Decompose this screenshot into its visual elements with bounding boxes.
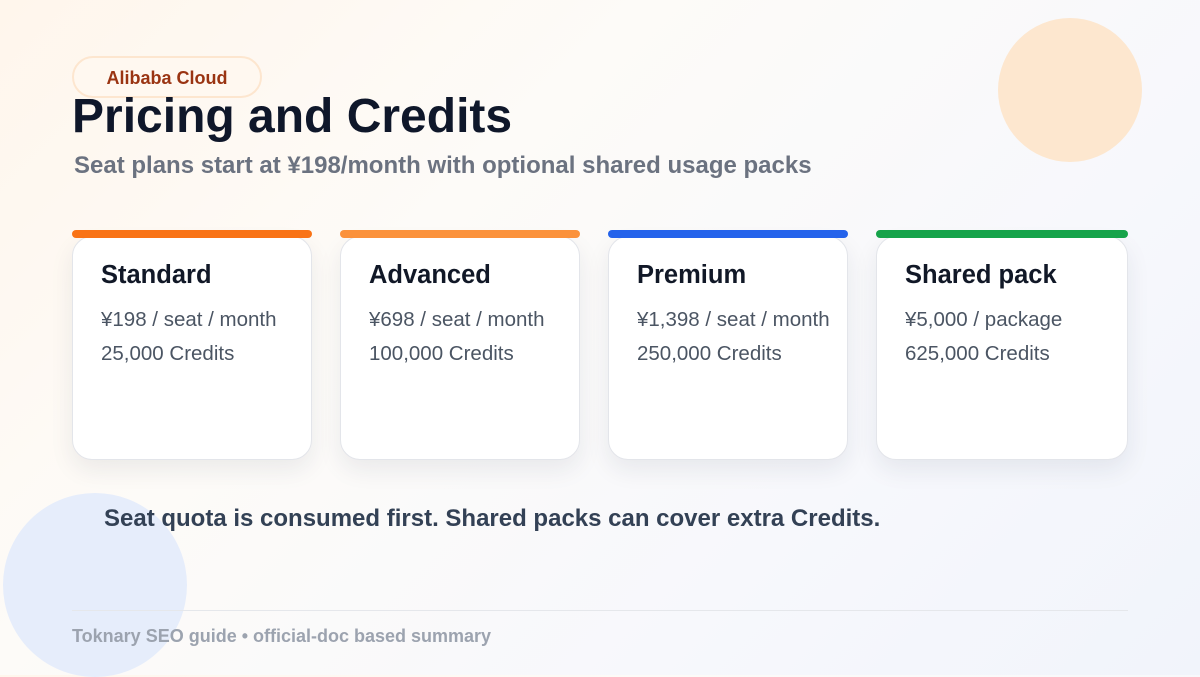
title: Pricing and Credits: [72, 90, 512, 143]
panel: Shared pack: ¥5,000 / package: [905, 308, 1062, 331]
panel: Premium: 250,000 Credits: [637, 342, 782, 365]
note: Seat quota is consumed first. Shared packs can cover extra Credits.: [104, 505, 880, 532]
panel: Standard: [72, 236, 312, 460]
panel: Standard: 25,000 Credits: [101, 342, 234, 365]
decorative circle top right: [998, 18, 1142, 162]
panel: Premium: ¥1,398 / seat / month: [637, 308, 830, 331]
badge: Alibaba Cloud: [106, 68, 228, 88]
panel: Advanced: Advanced: [369, 261, 491, 289]
panel: Advanced: ¥698 / seat / month: [369, 308, 545, 331]
panel: Standard: ¥198 / seat / month: [101, 308, 277, 331]
panel: Premium: Premium: [637, 261, 746, 289]
badge: [72, 56, 262, 98]
decorative circle bottom left: [3, 493, 187, 677]
panel: Shared pack: Shared pack: [905, 261, 1057, 289]
footer: Toknary SEO guide • official-doc based summary: [72, 626, 491, 646]
panel: Advanced: [340, 236, 580, 460]
panel: Shared pack: [876, 236, 1128, 460]
subtitle: Seat plans start at ¥198/month with optional shared usage packs: [74, 152, 812, 179]
panel: Shared pack: 625,000 Credits: [905, 342, 1050, 365]
panel: Premium: [608, 236, 848, 460]
panel: Advanced: 100,000 Credits: [369, 342, 514, 365]
panel: Standard: Standard: [101, 261, 212, 289]
